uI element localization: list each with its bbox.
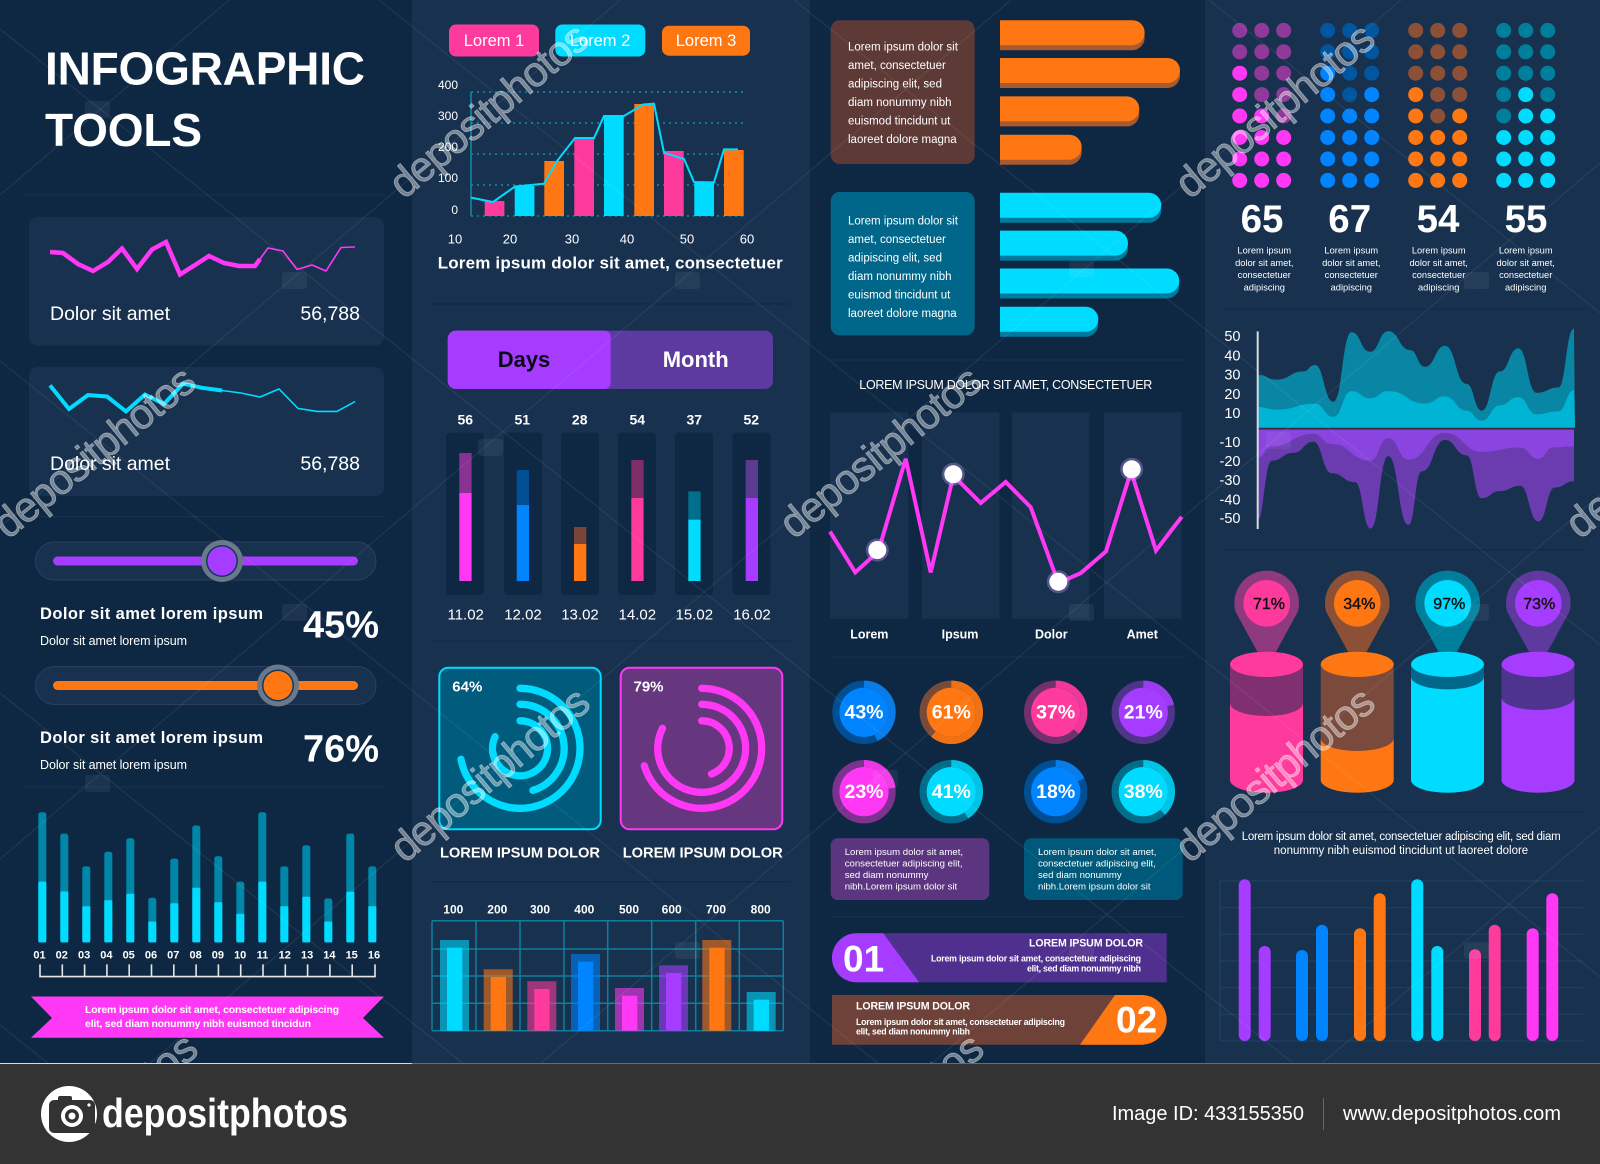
panel: magenta radial chart: 79% [634, 679, 664, 696]
dated bar chart: 12.02 [504, 607, 542, 624]
text box: teal: nibh.Lorem ipsum dolor sit [1038, 881, 1151, 892]
bar chart: sixteen cyan bars: 05 [123, 949, 135, 961]
combo chart: 200 [438, 140, 458, 154]
panel: cyan radial chart [439, 668, 601, 861]
donut gauges: 38% [1124, 781, 1163, 803]
heading: line chart: LOREM IPSUM DOLOR SIT AMET, CONSECTETUER [859, 378, 1152, 392]
text block: slider 1 caption: Dolor sit amet lorem ipsum [40, 634, 187, 648]
dated bar chart: 54 [630, 412, 645, 428]
panel: cyan radial chart: 64% [452, 679, 482, 696]
dot matrix numbers and captions: dolor sit amet, [1322, 258, 1380, 268]
footer bar: Image ID: 433155350 [1112, 1103, 1304, 1125]
text block: slider 2 caption: Dolor sit amet lorem ipsum [40, 758, 187, 772]
panel: magenta sparkline [29, 217, 384, 346]
grid bar chart: 300 [530, 902, 550, 916]
dated bar chart [446, 412, 771, 624]
combo chart: 30 [565, 232, 579, 247]
bar chart: sixteen cyan bars: 15 [346, 949, 358, 961]
combo chart: 300 [438, 109, 458, 123]
bar chart: sixteen cyan bars: 06 [145, 949, 157, 961]
bar chart: sixteen cyan bars: 04 [100, 949, 113, 961]
banner 01: LOREM IPSUM DOLOR [1029, 937, 1143, 949]
dot matrix numbers and captions: Lorem ipsum [1237, 246, 1291, 256]
dot matrix numbers and captions: dolor sit amet, [1410, 258, 1468, 268]
dated bar chart: 15.02 [676, 607, 713, 624]
banner 02: LOREM IPSUM DOLOR [856, 1000, 970, 1012]
bar chart: sixteen cyan bars: 13 [301, 949, 313, 961]
footer bar: depositphotos [102, 1090, 348, 1136]
grid bar chart: 500 [619, 902, 639, 916]
donut gauges: 21% [1124, 702, 1163, 724]
location pins: 97% [1433, 596, 1465, 613]
dot matrix numbers and captions: dolor sit amet, [1497, 258, 1555, 268]
legend buttons [449, 24, 750, 56]
donut gauges [836, 684, 1172, 820]
watermark overlay: tos [919, 1023, 992, 1095]
donut gauges: 18% [1036, 781, 1075, 803]
line chart with columns: Dolor [1035, 628, 1068, 642]
panel: brown text box: diam nonummy nibh [848, 97, 952, 109]
dated bar chart: 52 [744, 412, 759, 428]
area chart: -10 [1220, 435, 1240, 451]
grid bar chart: 700 [706, 902, 726, 916]
dated bar chart: 16.02 [733, 607, 771, 624]
donut gauges: 23% [844, 781, 884, 803]
banner 02 [832, 995, 1167, 1045]
chart caption: Lorem ipsum dolor sit amet, consectetuer [438, 254, 783, 273]
text block: slider 2 caption [40, 729, 379, 772]
text box: teal: sed diam nonummy [1038, 870, 1122, 881]
panel: teal text box: adipiscing elit, sed [848, 253, 942, 265]
ribbon [31, 996, 384, 1038]
watermark overlay: depositphotos [381, 677, 598, 871]
panel: brown text box: Lorem ipsum dolor sit [848, 42, 959, 54]
legend buttons: Lorem 1 [464, 32, 524, 50]
legend buttons: Lorem 3 [676, 32, 736, 50]
dot matrix numbers and captions: consectetuer [1238, 270, 1291, 280]
text block: slider 1 caption: Dolor sit amet lorem ipsum [40, 605, 263, 623]
bar chart: sixteen cyan bars: 02 [56, 949, 68, 961]
watermark overlay: depositphotos [380, 13, 597, 207]
combo chart: 40 [620, 232, 634, 247]
combo chart [438, 78, 754, 247]
banner 02: Lorem ipsum dolor sit amet, consectetuer adipiscing [856, 1017, 1065, 1027]
panel: cyan sparkline: 56,788 [300, 453, 360, 475]
combo chart: 10 [448, 232, 462, 247]
area chart: 10 [1224, 406, 1240, 422]
banner 02: 02 [1116, 999, 1157, 1040]
area chart: 20 [1224, 387, 1240, 403]
panel: teal text box: euismod tincidunt ut [848, 290, 951, 302]
line chart with columns: Ipsum [942, 628, 978, 642]
dot matrix: four groups [1232, 23, 1555, 188]
dot matrix numbers and captions: Lorem ipsum [1499, 246, 1553, 256]
ribbon: Lorem ipsum dolor sit amet, consectetuer adipiscing [85, 1004, 339, 1016]
location pins [1234, 571, 1571, 652]
bar chart: sixteen cyan bars: 11 [257, 949, 268, 961]
panel: teal text box: diam nonummy nibh [848, 271, 952, 283]
combo chart: 0 [451, 203, 458, 217]
dot matrix numbers and captions: consectetuer [1325, 270, 1378, 280]
line chart with columns: Amet [1127, 628, 1159, 642]
donut gauges: 37% [1036, 702, 1075, 724]
toggle: days and month: Days [498, 347, 550, 372]
bar chart: sixteen cyan bars: 16 [368, 949, 380, 961]
dot matrix numbers and captions: dolor sit amet, [1235, 258, 1293, 268]
bar chart: sixteen cyan bars: 12 [279, 949, 291, 961]
banner 01: 01 [843, 939, 884, 980]
bar chart: sixteen cyan bars: 08 [189, 949, 202, 961]
dot matrix numbers and captions: 65 [1241, 198, 1283, 241]
toggle: days and month: Month [663, 347, 729, 372]
cylinder chart [1230, 652, 1574, 793]
text box: teal: Lorem ipsum dolor sit amet, [1038, 847, 1156, 858]
text box: teal: consectetuer adipiscing elit, [1038, 858, 1156, 869]
grid bar chart: 100 [443, 902, 464, 916]
grid bar chart: 200 [487, 902, 508, 916]
dot matrix numbers and captions: adipiscing [1331, 282, 1372, 292]
dated bar chart: 14.02 [619, 607, 656, 624]
dot matrix numbers and captions: adipiscing [1505, 282, 1546, 292]
banner 01 [832, 933, 1167, 982]
footer bar: www.depositphotos.com [1342, 1103, 1561, 1125]
ribbon: elit, sed diam nonummy nibh euismod tincidun [85, 1018, 311, 1030]
panel: teal text box: amet, consectetuer [848, 234, 946, 246]
panel: brown text box: euismod tincidunt ut [848, 116, 951, 128]
line chart with columns [830, 412, 1182, 642]
location pins: 73% [1523, 596, 1555, 613]
slider: 76 percent [36, 664, 376, 706]
watermark overlay: depositphotos [1166, 677, 1383, 871]
combo chart: 400 [438, 78, 458, 92]
area chart: 30 [1224, 368, 1240, 384]
bar chart: sixteen cyan bars: 10 [234, 949, 246, 961]
panel: brown text box: adipiscing elit, sed [848, 78, 942, 90]
orange horizontal bars [1000, 20, 1180, 165]
area chart: -40 [1220, 492, 1240, 508]
dated bar chart: 28 [572, 412, 588, 428]
footer bar [0, 1063, 1600, 1164]
line chart with columns: Lorem [850, 628, 888, 642]
watermark overlay: tos [133, 1023, 206, 1095]
text box: teal [1024, 838, 1183, 900]
panel: brown text box: amet, consectetuer [848, 60, 946, 72]
grid bar chart: 600 [662, 902, 682, 916]
panel: cyan radial chart: LOREM IPSUM DOLOR [440, 845, 600, 861]
bar chart: sixteen cyan bars [33, 812, 380, 977]
cyan horizontal bars [1000, 193, 1179, 337]
title: INFOGRAPHIC [45, 42, 365, 94]
location pins: 34% [1343, 596, 1375, 613]
title: TOOLS [45, 104, 202, 156]
combo chart: 50 [680, 232, 694, 247]
donut gauges: 41% [932, 781, 971, 803]
donut gauges: 61% [932, 702, 971, 724]
bar chart: sixteen cyan bars: 03 [78, 949, 90, 961]
panel: magenta sparkline: Dolor sit amet [50, 303, 171, 325]
dot matrix numbers and captions: Lorem ipsum [1324, 246, 1378, 256]
dated bar chart: 11.02 [447, 607, 484, 624]
grid bar chart [432, 902, 783, 1031]
dot matrix numbers and captions: adipiscing [1418, 282, 1459, 292]
location pins: 71% [1253, 596, 1285, 613]
text box: purple: sed diam nonummy [845, 870, 929, 881]
banner 01: Lorem ipsum dolor sit amet, consectetuer adipiscing [931, 954, 1141, 964]
slider: 45 percent [36, 540, 376, 582]
banner 02: elit, sed diam nonummy nibh [856, 1026, 970, 1036]
donut gauges: 43% [844, 702, 884, 724]
watermark overlay: depositphotos [1166, 13, 1383, 207]
dot matrix numbers and captions: consectetuer [1412, 270, 1465, 280]
text block: slider 2 caption: Dolor sit amet lorem ipsum [40, 729, 263, 747]
legend buttons: Lorem 2 [570, 32, 630, 50]
icon: camera logo [41, 1086, 97, 1142]
sparkline: magenta [50, 242, 355, 274]
dot matrix numbers and captions: 67 [1328, 198, 1371, 241]
text block: slider 1 caption [40, 604, 379, 648]
bar chart: sixteen cyan bars: 07 [167, 949, 179, 961]
area chart: 40 [1224, 348, 1240, 364]
grid bar chart: 800 [751, 902, 771, 916]
paragraph [1242, 831, 1561, 857]
dot matrix numbers and captions: adipiscing [1244, 282, 1285, 292]
dot matrix numbers and captions: 54 [1417, 198, 1460, 241]
bar chart: sixteen cyan bars: 14 [323, 949, 336, 961]
bar chart: sixteen cyan bars: 01 [33, 949, 46, 961]
panel: magenta sparkline: 56,788 [300, 303, 360, 325]
sparkline: cyan [50, 384, 355, 411]
toggle: days and month [448, 331, 773, 389]
area chart: -30 [1220, 473, 1240, 489]
panel: teal text box [831, 192, 975, 335]
text box: purple: Lorem ipsum dolor sit amet, [845, 847, 963, 858]
text box: purple [831, 838, 989, 900]
panel: cyan sparkline [29, 367, 384, 496]
title [45, 42, 365, 156]
text block: slider 1 caption: 45% [303, 604, 379, 646]
dated bar chart: 37 [687, 412, 702, 428]
dot matrix numbers and captions: consectetuer [1499, 270, 1552, 280]
bar chart: sixteen cyan bars: 09 [212, 949, 224, 961]
dot matrix numbers and captions [1235, 198, 1555, 292]
dot matrix numbers and captions: 55 [1505, 198, 1547, 241]
combo chart: 20 [503, 232, 517, 247]
paragraph: nonummy nibh euismod tincidunt ut laoreet dolore [1274, 845, 1528, 857]
text block: slider 2 caption: 76% [303, 729, 379, 771]
banner 01: elit, sed diam nonummy nibh [1027, 963, 1141, 973]
paragraph: Lorem ipsum dolor sit amet, consectetuer adipiscing elit, sed diam [1242, 831, 1561, 843]
watermark overlay: depositphotos [770, 356, 990, 547]
dated bar chart: 51 [515, 412, 530, 428]
panel: cyan sparkline: Dolor sit amet [50, 453, 171, 475]
text box: purple: consectetuer adipiscing elit, [845, 858, 963, 869]
area chart: -50 [1220, 511, 1240, 527]
area chart [1220, 329, 1575, 529]
dot matrix numbers and captions: Lorem ipsum [1412, 246, 1466, 256]
area chart: 50 [1224, 329, 1240, 345]
panel: magenta radial chart [621, 668, 783, 861]
panel: teal text box: Lorem ipsum dolor sit [848, 216, 959, 228]
text box: purple: nibh.Lorem ipsum dolor sit [845, 881, 958, 892]
panel: brown text box: laoreet dolore magna [848, 134, 957, 146]
area chart: -20 [1220, 454, 1240, 470]
paired rounded bar chart [1220, 879, 1583, 1041]
panel: brown text box [831, 20, 975, 164]
combo chart: 100 [438, 171, 458, 185]
dated bar chart: 56 [458, 412, 473, 428]
dated bar chart: 13.02 [561, 607, 599, 624]
panel: magenta radial chart: LOREM IPSUM DOLOR [623, 845, 783, 861]
grid bar chart: 400 [574, 902, 595, 916]
panel: teal text box: laoreet dolore magna [848, 308, 957, 320]
combo chart: 60 [740, 232, 754, 247]
